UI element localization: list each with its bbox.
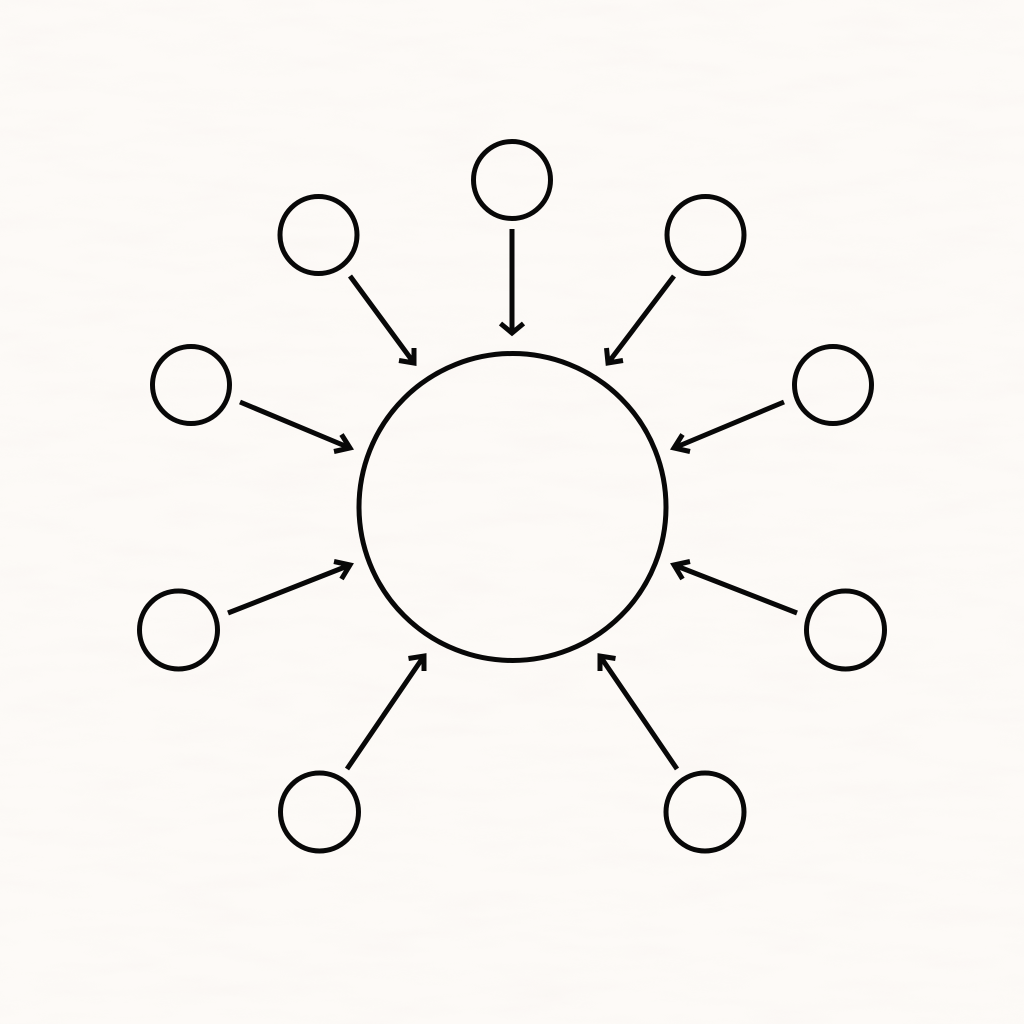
arrow: bottom left	[347, 656, 424, 769]
central circle	[359, 354, 666, 660]
node: bottom right	[666, 773, 744, 851]
node: bottom left	[280, 773, 358, 851]
arrow: right lower	[674, 562, 797, 613]
node: left lower	[140, 591, 218, 669]
arrow: top left	[350, 276, 414, 363]
node: right lower	[806, 591, 884, 669]
node: top right	[667, 196, 744, 274]
arrow: left upper	[240, 402, 350, 452]
arrow: top	[500, 229, 524, 333]
node: right upper	[794, 346, 872, 424]
node: left upper	[152, 346, 230, 424]
arrow: right upper	[674, 402, 784, 452]
node: top	[474, 142, 550, 218]
arrow: bottom right	[600, 656, 677, 769]
node: top left	[280, 196, 357, 274]
arrow: top right	[606, 276, 674, 363]
arrow: left lower	[228, 562, 350, 613]
